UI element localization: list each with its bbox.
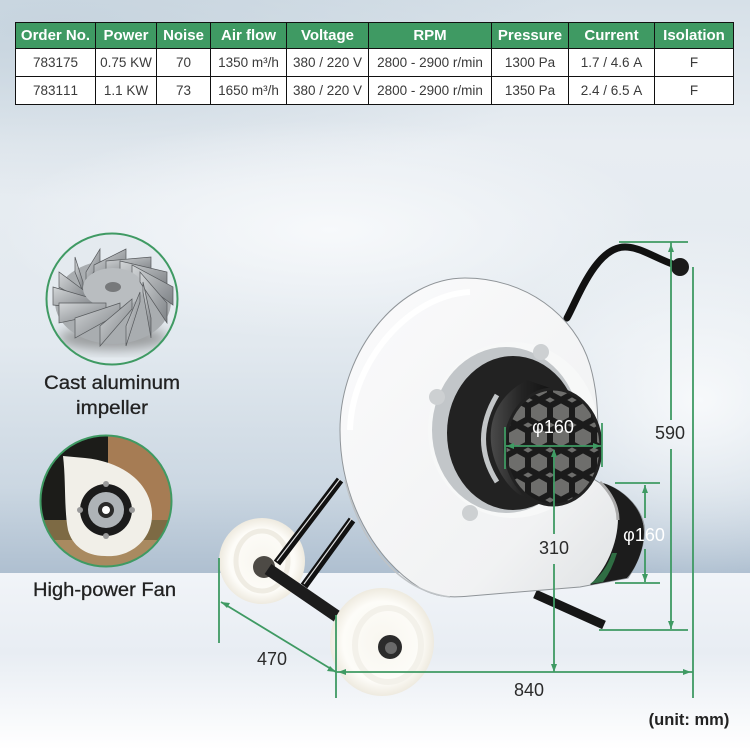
row: 783175: 0.75 KW bbox=[100, 55, 152, 70]
row: 783175: 380 / 220 V bbox=[293, 55, 362, 70]
table header row: Noise bbox=[163, 27, 204, 44]
row: 783111: 1650 m³/h bbox=[218, 83, 279, 98]
table header row: Power bbox=[103, 27, 148, 44]
row: 783111: 1350 Pa bbox=[505, 83, 555, 98]
dimension: length 840 bbox=[336, 267, 693, 700]
row: 783111: 2800 - 2900 r/min bbox=[377, 83, 483, 98]
dimension: depth 470 bbox=[219, 558, 336, 672]
dimension: inlet height 310: 310 bbox=[539, 538, 569, 558]
motor ring bbox=[447, 356, 579, 510]
inlet grille bbox=[505, 389, 601, 505]
caption: high-power fan: High-power Fan bbox=[33, 579, 176, 601]
dimension: length 840: 840 bbox=[514, 680, 544, 700]
dimension: inlet diameter bbox=[505, 417, 602, 469]
table header row: Voltage bbox=[301, 27, 354, 44]
dimension: outlet diameter bbox=[615, 483, 665, 583]
row: 783175: 1.7 / 4.6 A bbox=[581, 55, 642, 70]
handle bar bbox=[567, 247, 675, 318]
row: 783111: 2.4 / 6.5 A bbox=[581, 83, 642, 98]
table header row: Pressure bbox=[498, 27, 562, 44]
handle knob bbox=[671, 258, 689, 276]
fan housing bbox=[340, 278, 644, 597]
dimension: outlet diameter: φ160 bbox=[623, 525, 665, 545]
caption: cast aluminum impeller: impeller bbox=[76, 397, 149, 419]
table header row: Isolation bbox=[663, 27, 725, 44]
table header row: RPM bbox=[413, 27, 447, 44]
caption: cast aluminum impeller bbox=[44, 372, 180, 419]
row: 783175: 783175 bbox=[33, 55, 78, 70]
row: 783175 bbox=[33, 55, 698, 70]
dimension: inlet height 310 bbox=[539, 449, 569, 672]
row: 783175: F bbox=[690, 55, 698, 70]
table header row: Air flow bbox=[221, 27, 276, 44]
row: 783175: 2800 - 2900 r/min bbox=[377, 55, 483, 70]
row: 783175: 1300 Pa bbox=[505, 55, 555, 70]
table header row: Current bbox=[584, 27, 639, 44]
dimension: height 590: 590 bbox=[655, 423, 685, 443]
clamps bbox=[429, 344, 549, 521]
table header row bbox=[16, 23, 733, 98]
thumbnail: cast aluminum impeller bbox=[46, 234, 178, 364]
row: 783111: 783111 bbox=[33, 83, 78, 98]
row: 783111: 1.1 KW bbox=[104, 83, 148, 98]
inlet tube bbox=[491, 380, 553, 505]
unit note: (unit: mm) bbox=[649, 711, 729, 729]
row: 783175: 1350 m³/h bbox=[218, 55, 279, 70]
row: 783111 bbox=[33, 83, 698, 98]
caption: cast aluminum impeller: Cast aluminum bbox=[44, 372, 180, 394]
thumbnail: high-power fan bbox=[40, 434, 172, 568]
row: 783111: 380 / 220 V bbox=[293, 83, 362, 98]
dimension: depth 470: 470 bbox=[257, 649, 287, 669]
row: 783111: 73 bbox=[176, 83, 191, 98]
row: 783175: 70 bbox=[176, 55, 191, 70]
mounting ring bbox=[432, 347, 580, 513]
specification table bbox=[15, 22, 734, 105]
dimension: height 590 bbox=[599, 242, 688, 630]
row: 783111: F bbox=[690, 83, 698, 98]
rear frame and wheels bbox=[219, 479, 604, 696]
dimension: inlet diameter: φ160 bbox=[532, 417, 574, 437]
table header row: Order No. bbox=[21, 27, 90, 44]
